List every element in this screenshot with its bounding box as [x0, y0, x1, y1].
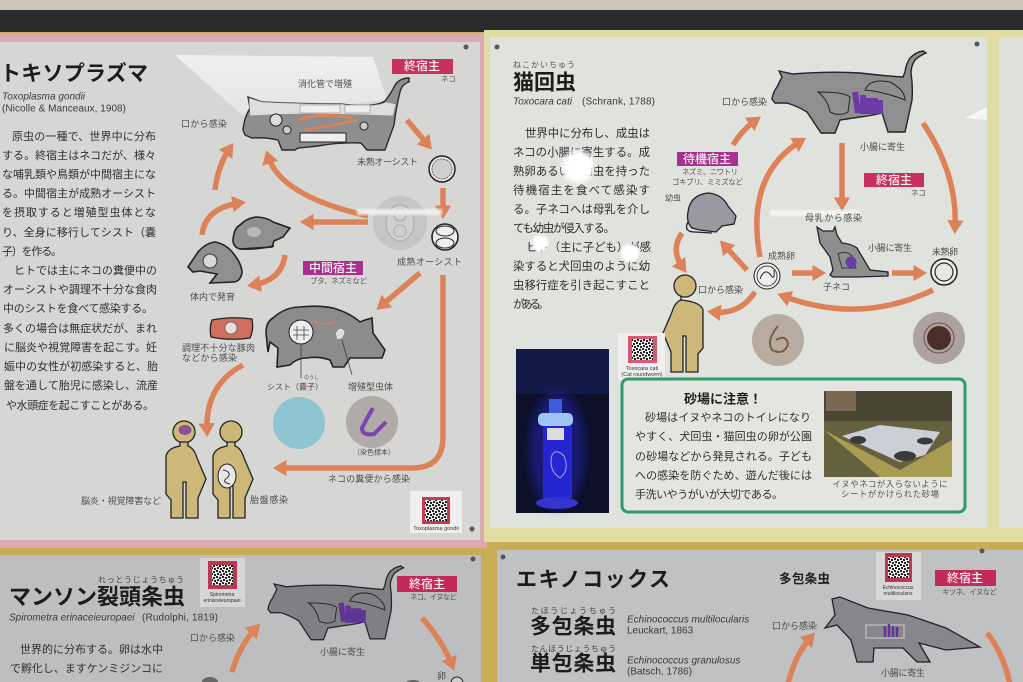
label: feces infection: ネコの糞便から感染 [328, 473, 410, 484]
text block: toxoplasma description [2, 129, 158, 412]
heading: toxocara [513, 60, 655, 108]
label: multilocular tapeworm: 多包条虫 [779, 571, 830, 586]
label: encephalitis: 脳炎・視覚障害など [81, 495, 161, 506]
QR: spirometra [200, 558, 245, 607]
icon: human toxocara [663, 275, 703, 372]
label: oral infection spirometra: 口から感染 [190, 632, 235, 643]
label: oral infection right: 口から感染 [722, 96, 767, 107]
label: paratenic host: ゴキブリ、ミミズなど [672, 176, 744, 186]
text block: toxoplasma description: る。中間宿主が成熟オーシスト [2, 186, 156, 200]
label: intermediate host [303, 260, 368, 286]
heading: echinococcus: (Batsch, 1786) [627, 666, 692, 678]
label: undercooked meat [182, 342, 255, 363]
icon: mouse paratenic [687, 193, 736, 233]
callout: sandbox warning: 砂場に注意！ [684, 392, 762, 406]
label: paratenic host [672, 151, 744, 186]
icon: cat with parasite stages [243, 78, 409, 150]
heading: toxoplasma [0, 62, 148, 114]
heading: toxocara: (Schrank, 1788) [582, 96, 655, 108]
text block: toxoplasma description: 子）を作る。 [2, 245, 62, 258]
text block: toxocara description [513, 127, 651, 311]
text block: toxoplasma description: を摂取すると増殖型虫体とな [2, 205, 156, 219]
text block: toxocara description: 世界中に分布し、成虫は [525, 127, 650, 140]
label: oral infection cat: 口から感染 [181, 118, 227, 129]
text block: toxoplasma description: や水頭症を起こすことがある。 [6, 398, 154, 412]
text block: toxoplasma description: 中のシストを食べて感染する。 [3, 301, 153, 315]
QR: toxocara: (Cat roundworm) [621, 372, 663, 378]
photo: stained micrograph [346, 396, 398, 448]
photo: covered sandbox [824, 391, 952, 477]
QR: echinococcus: multilocularis [884, 591, 913, 597]
text block: toxocara description: る。子ネコへは母乳を介し [513, 203, 650, 216]
label: multiplies in gut: 消化管で増殖 [298, 78, 352, 89]
QR: toxocara: Toxocara cati [626, 366, 658, 372]
label: grows in body: 体内で発育 [190, 291, 235, 302]
text block: toxoplasma description: オーシストや調理不十分な食肉 [3, 282, 157, 296]
photo: blue cyst micrograph [273, 397, 325, 449]
label: definitive host toxocara: 終宿主 [876, 172, 912, 187]
icon: kitten [817, 227, 888, 277]
text block: spirometra description [10, 642, 163, 675]
text block: toxoplasma description: 原虫の一種で、世界中に分布 [12, 129, 156, 143]
text block: toxoplasma description: ヒトでは主にネコの糞便中の [14, 263, 157, 277]
text block: toxocara description: がある。 [513, 297, 549, 311]
QR: echinococcus: Echinococcus [883, 585, 914, 591]
label: proliferative form: 増殖型虫体 [348, 381, 393, 392]
label: kitten: 子ネコ [823, 282, 850, 292]
QR: toxocara [618, 333, 665, 380]
arrows: toxoplasma cycle [202, 120, 443, 468]
label: intermediate host: ブタ、ネズミなど [310, 276, 368, 286]
glare on toxoplasma panel [175, 55, 387, 115]
label: definitive host toxocara [864, 172, 926, 198]
text block: toxocara description: ネコの小腸に寄生する。成 [513, 145, 650, 159]
photo: oocyst micrograph [373, 196, 427, 250]
callout: sandbox warning: やすく、犬回虫・猫回虫の卵が公園 [635, 429, 812, 443]
label: immature oocyst: 未熟オーシスト [357, 156, 418, 167]
label: definitive host toxoplasma [392, 58, 456, 84]
text block: toxoplasma description: 多くの場合は無症状だが、まれ [3, 321, 157, 335]
text block: toxoplasma description: 娠中の女性が初感染すると、胎 [4, 359, 158, 373]
icon: fox [825, 597, 980, 662]
heading: toxocara: 猫回虫 [513, 72, 576, 94]
label: oral infection fox: 口から感染 [772, 620, 817, 631]
label: larva: 幼虫 [665, 192, 681, 202]
text block: spirometra description: で孵化し、ますケンミジンコに [10, 661, 163, 675]
panel: toxoplasma frame [0, 33, 487, 548]
heading: echinococcus: Echinococcus multilocularis [627, 614, 749, 626]
arrows: echinococcus cycle [788, 633, 1011, 682]
label: definitive host echinococcus: 終宿主 [947, 570, 983, 585]
text block: toxoplasma description: 盤を通して胎児に感染し、流産 [4, 378, 158, 392]
text block: spirometra description: 世界的に分布する。卵は水中 [20, 642, 163, 656]
label: definitive host toxoplasma: 終宿主 [404, 58, 440, 73]
label: paratenic host: ネズミ、ニワトリ [682, 166, 738, 176]
label: intermediate host: 中間宿主 [309, 260, 357, 275]
callout: sandbox warning [622, 379, 965, 512]
icon: pregnant human [213, 421, 253, 518]
label: definitive host spirometra: ネコ、イヌなど [410, 592, 458, 602]
label: oral infection human: 口から感染 [698, 284, 743, 295]
heading: toxoplasma: Toxoplasma gondii [2, 92, 86, 102]
icon: immature egg [931, 259, 957, 285]
heading: toxoplasma: (Nicolle & Manceaux, 1908) [2, 104, 126, 114]
QR: spirometra: Spirometra [210, 592, 234, 598]
icon: immature oocyst [429, 156, 455, 182]
heading: spirometra: れっとうじょうちゅう [98, 576, 184, 584]
icon: mouse upper [233, 217, 290, 249]
panel: bottom frames [0, 548, 1023, 682]
icon: mature egg [754, 263, 780, 289]
callout: sandbox warning: 砂場はイヌやネコのトイレになり [645, 411, 811, 424]
label: cyst [267, 375, 323, 392]
QR: toxoplasma [410, 491, 462, 533]
glare strip [357, 209, 442, 215]
QR: spirometra: erinaceieuropaei [204, 598, 240, 604]
icon: mouse lower [188, 242, 242, 283]
photo: immature egg micrograph [913, 312, 965, 364]
label: definitive host echinococcus [935, 570, 998, 596]
icon: egg fragments [202, 677, 463, 682]
callout: sandbox warning: シートがかけられた砂場 [841, 489, 940, 499]
heading: echinococcus: 単包条虫 [530, 652, 616, 676]
arrows: toxocara cycle [676, 120, 955, 312]
text block: toxocara description: 熟卵あるいは幼虫を持った [513, 164, 650, 178]
heading: toxoplasma: トキソプラズマ [0, 62, 148, 86]
icon: human with brain [166, 421, 206, 518]
photo: mature egg micrograph [752, 314, 804, 366]
label: milk infection: 母乳から感染 [805, 212, 862, 223]
icon: mature oocyst [432, 224, 458, 250]
QR: toxoplasma: Toxoplasma gondii [413, 526, 459, 532]
panel: neighbouring panel edge [992, 30, 1023, 542]
heading: spirometra: (Rudolphi, 1819) [142, 612, 218, 624]
glare on toxocara panel [770, 107, 987, 216]
label: stained specimen: （染色標本） [353, 448, 395, 456]
callout: sandbox warning: の砂場などから発見される。子ども [635, 449, 812, 463]
text block: toxocara description: ヒト（主に子ども）が感 [526, 240, 651, 254]
heading: toxocara: ねこかいちゅう [513, 60, 575, 70]
heading: echinococcus: 多包条虫 [530, 616, 616, 638]
heading: echinococcus: たんほうじょうちゅう [531, 644, 616, 654]
arrows: spirometra cycle [232, 618, 452, 672]
label: intestine spirometra: 小腸に寄生 [320, 646, 365, 657]
glare spots [532, 151, 639, 262]
label: undercooked meat: などから感染 [182, 352, 237, 363]
label: egg: 卵 [437, 670, 446, 681]
label: small intestine: 小腸に寄生 [860, 141, 905, 152]
text block: toxoplasma description: な哺乳類や鳥類が中間宿主にな [2, 167, 156, 181]
mounting screws [464, 42, 984, 562]
icon: cat spirometra [268, 566, 404, 640]
label: mature egg: 成熟卵 [768, 250, 795, 261]
QR: echinococcus [876, 552, 921, 600]
label: cyst: シスト（嚢子） [267, 382, 323, 392]
label: definitive host echinococcus: キツネ、イヌなど [942, 588, 998, 596]
icon: meat [210, 318, 253, 339]
heading: toxocara: Toxocara cati [513, 96, 573, 108]
label: definitive host spirometra: 終宿主 [409, 576, 445, 591]
heading: echinococcus: Echinococcus granulosus [627, 656, 740, 666]
text block: toxocara description: ても幼虫が侵入する。 [513, 221, 615, 235]
label: placental infection: 胎盤感染 [250, 494, 288, 505]
heading: echinococcus: たほうじょうちゅう [531, 606, 616, 616]
heading: spirometra [9, 576, 218, 624]
text block: toxocara description: 染すると犬回虫のように幼 [513, 259, 650, 273]
heading: echinococcus: Leuckart, 1863 [627, 626, 694, 636]
callout: sandbox warning: への感染を防ぐため、遊んだ後には [635, 468, 812, 482]
text block: toxoplasma description: り、全身に移行してシスト（嚢 [2, 225, 156, 239]
label: definitive host toxoplasma: ネコ [441, 74, 456, 84]
text block: toxoplasma description: する。終宿主はネコだが、様々 [2, 148, 156, 162]
label: intestine fox: 小腸に寄生 [881, 667, 925, 678]
callout: sandbox warning: イヌやネコが入らないように [832, 479, 948, 489]
heading: echinococcus [516, 568, 749, 678]
icon: adult cat [772, 51, 926, 133]
callout: sandbox warning: 手洗いやうがいが大切である。 [635, 487, 783, 501]
label: definitive host spirometra [397, 576, 458, 602]
label: immature egg: 未熟卵 [932, 246, 958, 257]
text block: toxocara description: 虫移行症を引き起こすこと [513, 278, 650, 292]
label: cyst: のうし [304, 375, 319, 381]
text block: toxoplasma description: に脳炎や視覚障害を起こす。妊 [4, 340, 157, 354]
photo: roundworm jar specimen [516, 349, 609, 513]
heading: echinococcus: エキノコックス [516, 568, 670, 592]
label: mature oocyst: 成熟オーシスト [397, 256, 462, 267]
label: kitten intestine: 小腸に寄生 [868, 242, 912, 253]
panel: toxocara frame [484, 30, 995, 542]
heading: spirometra: マンソン裂頭条虫 [9, 584, 185, 610]
label: definitive host toxocara: ネコ [911, 188, 926, 198]
icon: pig [266, 306, 385, 378]
text block: toxocara description: 待機宿主を食べて感染す [513, 183, 650, 197]
heading: spirometra: Spirometra erinaceieuropaei [9, 612, 135, 624]
label: paratenic host: 待機宿主 [683, 151, 731, 166]
label: undercooked meat: 調理不十分な豚肉 [182, 342, 255, 353]
